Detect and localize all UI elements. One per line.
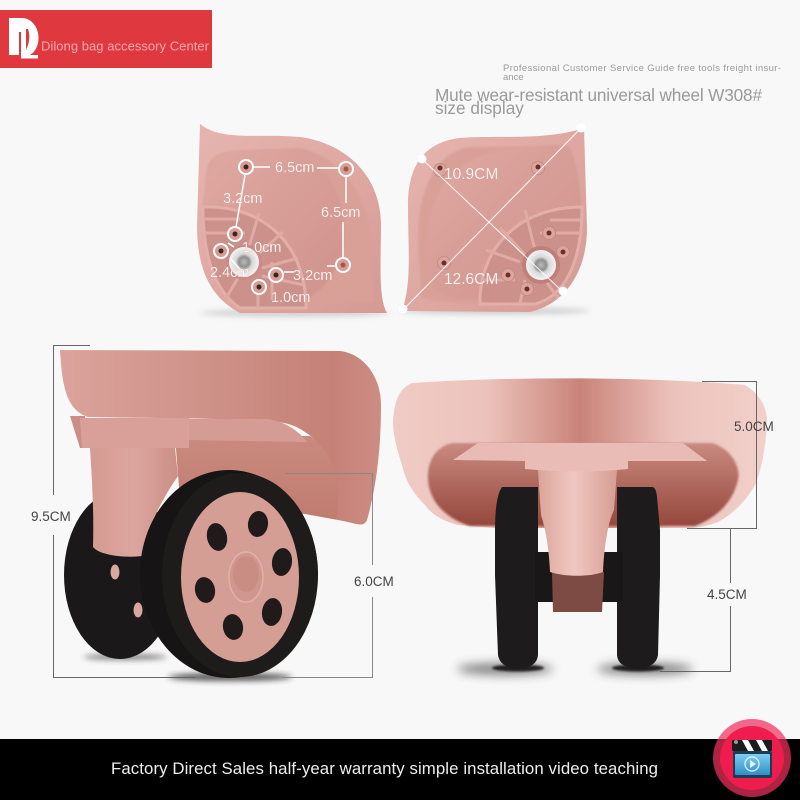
dimension: 9.5CM bbox=[31, 346, 195, 678]
bearing bbox=[226, 244, 262, 280]
brand name: Dilong bag accessory Center bbox=[41, 38, 210, 54]
left stub bbox=[70, 416, 85, 448]
measure lines bbox=[403, 128, 581, 310]
hub cap bbox=[229, 552, 263, 602]
subtitle: ance bbox=[503, 72, 524, 83]
brand banner bbox=[0, 10, 212, 68]
footer banner bbox=[0, 739, 800, 800]
title: Mute wear-resistant universal wheel W308# bbox=[435, 85, 762, 105]
title: size display bbox=[435, 98, 524, 118]
top body bbox=[60, 350, 381, 525]
title bbox=[435, 85, 762, 118]
bearing bbox=[522, 246, 560, 284]
shadow bbox=[168, 673, 292, 681]
panel: side view wheel bbox=[60, 350, 381, 681]
arm rib bbox=[188, 419, 307, 442]
icon: video play badge bbox=[713, 719, 791, 797]
mounting holes bbox=[434, 162, 570, 296]
dome bbox=[203, 149, 344, 300]
rear wheel bbox=[64, 491, 176, 659]
icon: DL logo bbox=[9, 18, 38, 58]
measure labels: 6.5cm bbox=[275, 160, 314, 176]
rib left bbox=[453, 443, 526, 461]
arm underside bbox=[175, 436, 360, 524]
dimension: 9.5CM: 9.5CM bbox=[31, 509, 71, 524]
collar bbox=[525, 443, 628, 472]
dimension: 6.0CM bbox=[282, 474, 394, 678]
measure labels bbox=[210, 160, 360, 306]
ribbed hub bbox=[480, 207, 582, 304]
clapper top bbox=[732, 740, 772, 751]
subtitle bbox=[503, 63, 781, 83]
collar bbox=[80, 418, 189, 448]
fork bbox=[90, 448, 178, 557]
rib right bbox=[628, 443, 707, 461]
dimension: 5.0CM bbox=[687, 382, 774, 528]
panel: front view wheel bbox=[393, 378, 767, 675]
left wheel bbox=[495, 487, 538, 668]
measure labels bbox=[444, 166, 498, 288]
fork bbox=[538, 470, 617, 576]
axle block bbox=[552, 572, 604, 612]
measure labels: 12.6CM bbox=[444, 271, 498, 288]
shadows bbox=[457, 663, 553, 675]
panel: plate underside left bbox=[197, 124, 390, 316]
panel: plate underside right bbox=[398, 124, 590, 314]
hub face bbox=[181, 492, 299, 662]
right wheel bbox=[617, 487, 660, 668]
subtitle: Professional Customer Service Guide free tools freight insur- bbox=[503, 63, 781, 74]
measure labels: 3.2cm bbox=[223, 191, 262, 207]
measure labels: 1.0cm bbox=[242, 240, 282, 256]
measure labels: 6.5cm bbox=[321, 205, 360, 221]
measure labels: 1.0cm bbox=[271, 290, 310, 306]
recessed floor bbox=[418, 145, 581, 304]
ribbed hub bbox=[203, 207, 306, 308]
measure lines bbox=[228, 167, 346, 275]
front tire bbox=[140, 470, 318, 678]
measure labels: 10.9CM bbox=[444, 166, 498, 183]
plate hollow bbox=[428, 443, 739, 526]
recessed floor bbox=[203, 148, 373, 303]
dome bbox=[428, 146, 581, 300]
dimension: 6.0CM: 6.0CM bbox=[354, 574, 394, 589]
clapper screen bbox=[733, 751, 772, 778]
measure labels: 3.2cm bbox=[293, 268, 332, 284]
footer banner: Factory Direct Sales half-year warranty simple installation video teaching bbox=[111, 759, 658, 778]
mounting holes bbox=[214, 160, 353, 294]
dimension: 5.0CM: 5.0CM bbox=[734, 419, 774, 434]
plate body bbox=[393, 378, 767, 528]
dimension: 4.500CM: 4.5CM bbox=[707, 587, 747, 602]
measure labels: 2.4cm bbox=[210, 265, 250, 281]
dimension: 4.500CM bbox=[660, 529, 747, 672]
axle bbox=[535, 552, 623, 602]
